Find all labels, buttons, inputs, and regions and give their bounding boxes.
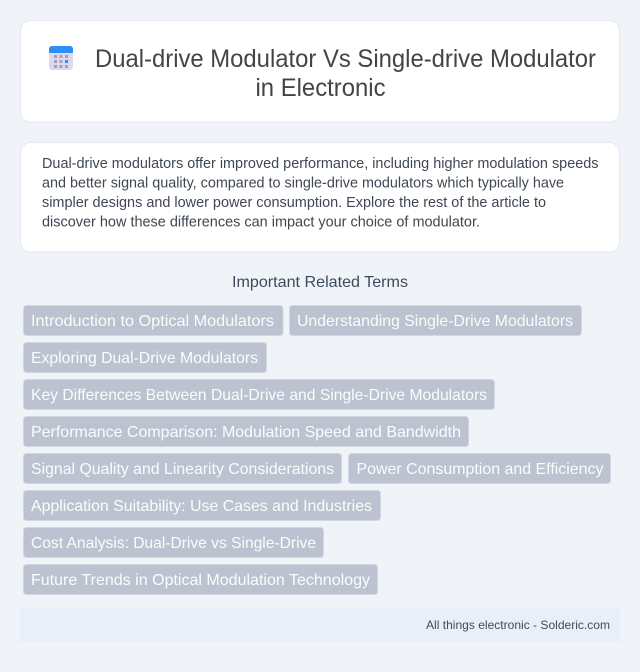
tag: key differences: Key Differences Between Dual-Drive and Single-Drive Modulators [31,387,487,404]
title: Dual-drive Modulator Vs Single-drive Modulator [95,45,596,73]
panel: description card [20,142,620,252]
tag: future: Future Trends in Optical Modulation Technology [31,572,370,589]
tag: signal quality: Signal Quality and Linearity Considerations [31,461,334,478]
tag: power [348,454,610,484]
tag: single-drive: Understanding Single-Drive Modulators [297,313,573,330]
tag: key differences [24,380,494,410]
tag: dual-drive [24,342,266,372]
tag: cost [24,528,324,558]
tag: performance [24,416,468,446]
description text: discover how these differences can impact your choice of modulator. [42,214,480,230]
description text: Dual-drive modulators offer improved performance, including higher modulation speeds [42,156,598,172]
description text: and better signal quality, compared to single-drive modulators which typically have [42,176,564,192]
tag: introduction: Introduction to Optical Modulators [31,313,274,330]
tag: power: Power Consumption and Efficiency [356,461,604,478]
tag: future [24,564,378,594]
panel: related term tags [24,306,610,594]
tag: cost: Cost Analysis: Dual-Drive vs Single-Drive [31,535,316,552]
tag: application: Application Suitability: Use Cases and Industries [31,498,372,515]
tag: dual-drive: Exploring Dual-Drive Modulators [31,350,258,367]
tag: signal quality [24,454,342,484]
panel: title card [20,20,620,122]
tag: performance: Performance Comparison: Modulation Speed and Bandwidth [31,424,461,441]
heading: important related terms: Important Related Terms [232,274,408,291]
icon: calendar [49,46,73,70]
tag: introduction [24,306,283,336]
title: in Electronic [256,74,386,102]
tag: single-drive [290,306,582,336]
description text: simpler designs and lower power consumption. Explore the rest of the article to [42,195,546,211]
footer [20,608,620,642]
description text [42,156,598,230]
title [95,45,596,102]
footer: All things electronic - Solderic.com [426,618,610,632]
tag: application [24,490,380,520]
